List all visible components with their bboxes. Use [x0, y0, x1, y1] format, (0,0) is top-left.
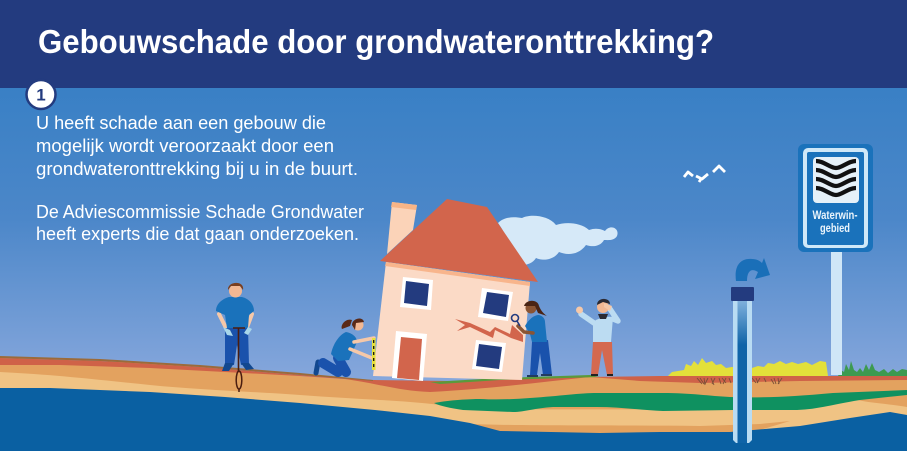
- ground layers: [0, 356, 907, 451]
- person: worried house owner: [576, 299, 618, 376]
- grass strip: [430, 375, 600, 384]
- grass tufts: [838, 361, 907, 376]
- person: expert with soil probe: [216, 283, 254, 392]
- sign: Waterwingebied: [798, 144, 873, 252]
- intro text: [36, 113, 364, 244]
- intro text: heeft experts die dat gaan onderzoeken.: [36, 224, 359, 244]
- step number badge: 1: [36, 86, 46, 104]
- green layer: [434, 390, 907, 412]
- sign label: Waterwin-: [812, 210, 858, 222]
- sign label: [812, 210, 858, 235]
- intro text: De Adviescommissie Schade Grondwater: [36, 202, 364, 222]
- person: expert measuring wall: [316, 318, 376, 373]
- arrow: pumped water: [736, 258, 770, 281]
- facade: [373, 262, 530, 380]
- yellow shrubs: [668, 358, 828, 376]
- sign icon: [813, 157, 859, 203]
- crack: [455, 319, 523, 342]
- red clay layer right: [590, 376, 907, 383]
- title: Gebouwschade door grondwateronttrekking?: [38, 23, 714, 60]
- birds: [684, 166, 725, 182]
- person: expert with magnifying glass: [512, 301, 552, 377]
- cloud: [498, 216, 618, 265]
- red clay layer left: [0, 358, 590, 392]
- window: [472, 340, 506, 372]
- house: [373, 199, 538, 381]
- intro text: grondwateronttrekking bij u in de buurt.: [36, 159, 358, 179]
- roof: [380, 199, 538, 282]
- window: [400, 277, 433, 310]
- well pipe: [731, 287, 754, 443]
- darker sand lower band: [470, 421, 790, 436]
- sign post: [831, 252, 842, 375]
- window: [478, 288, 513, 321]
- door: [392, 331, 427, 381]
- chimney: [387, 202, 417, 254]
- orange soil: [0, 358, 907, 451]
- sign label: gebied: [820, 223, 850, 235]
- light sand: [0, 372, 907, 451]
- roots: [697, 378, 782, 385]
- intro text: U heeft schade aan een gebouw die: [36, 113, 326, 133]
- groundwater: [0, 388, 907, 451]
- intro text: mogelijk wordt veroorzaakt door een: [36, 136, 334, 156]
- step number badge: [26, 80, 56, 109]
- header band: [0, 0, 907, 88]
- top brown soil: [0, 356, 373, 381]
